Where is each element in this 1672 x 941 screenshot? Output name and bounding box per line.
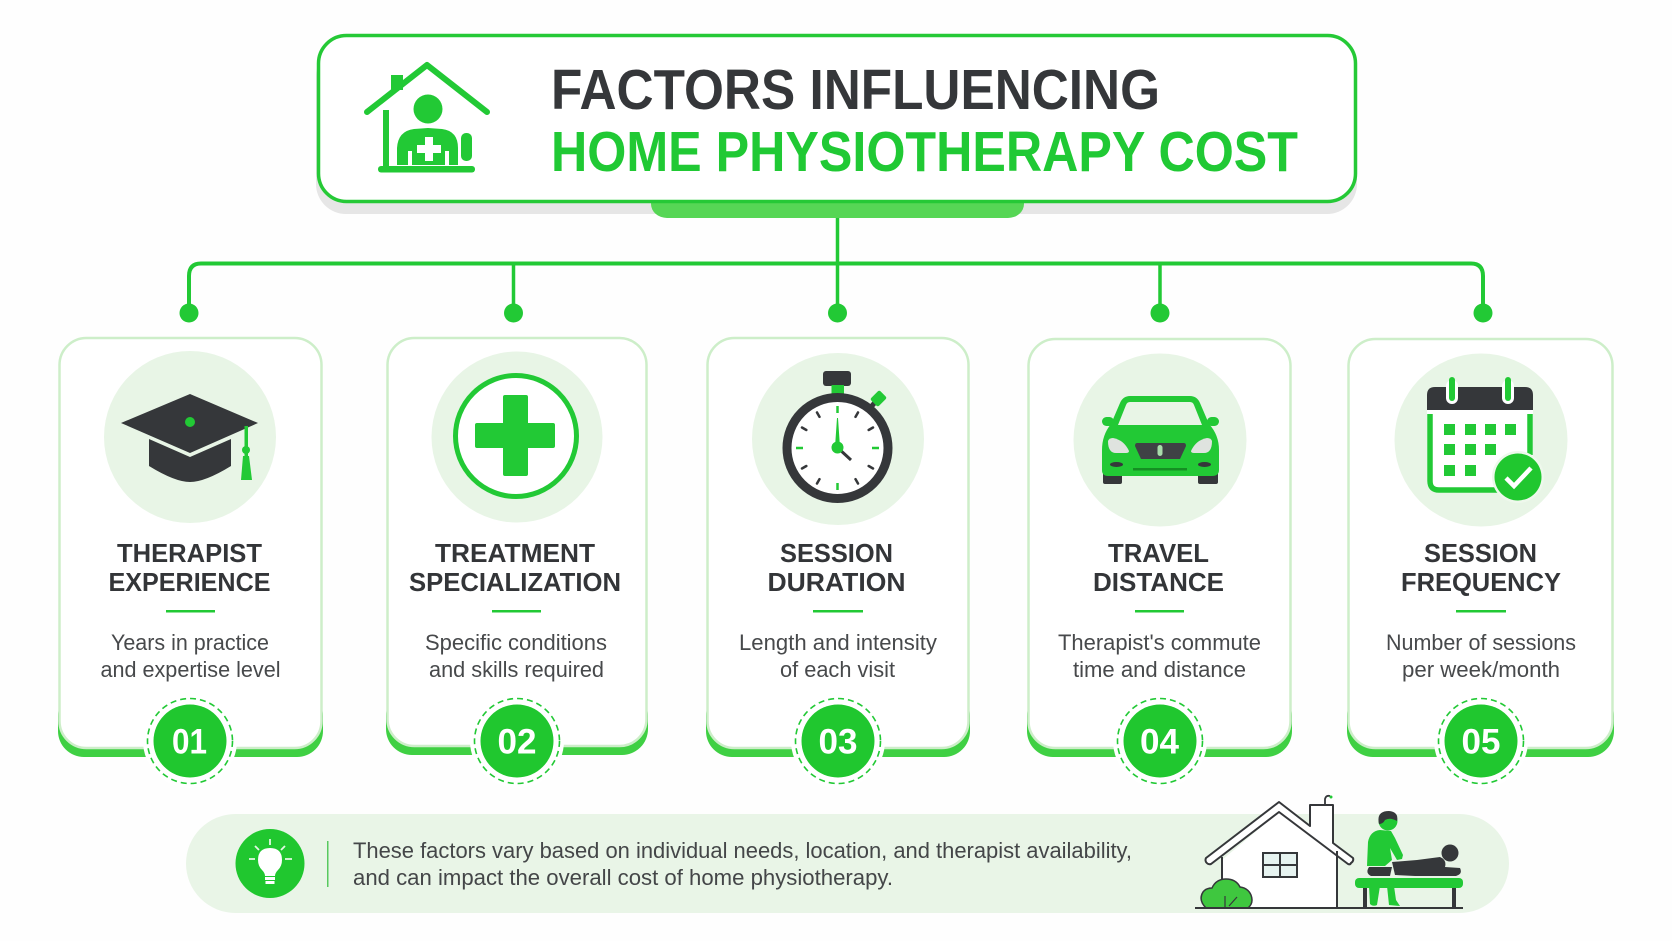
number badge 01: 01 (172, 722, 207, 762)
description: Therapist's commute (1058, 630, 1261, 655)
heading (768, 538, 906, 597)
description: and expertise level (100, 657, 280, 682)
icon: medical cross (456, 376, 576, 496)
panel: session duration (706, 338, 970, 788)
panel: therapist experience (58, 338, 323, 788)
number badge 05 (1434, 694, 1528, 788)
panel: treatment specialization (386, 338, 648, 788)
description (425, 630, 607, 682)
heading: TREATMENT (435, 538, 595, 568)
number badge 04 (1113, 694, 1207, 788)
number badge 03: 03 (818, 722, 858, 762)
description (1386, 630, 1576, 682)
icon: calendar with check (1427, 377, 1544, 503)
heading: TRAVEL (1108, 538, 1209, 568)
number badge 01 (143, 694, 237, 788)
heading: SESSION (1424, 538, 1537, 568)
icon: light bulb (236, 829, 304, 898)
heading: THERAPIST (117, 538, 262, 568)
heading: DURATION (768, 567, 906, 597)
footer text: These factors vary based on individual needs, location, and therapist availability, (353, 838, 1132, 863)
number badge 02: 02 (498, 722, 536, 762)
footer note panel (186, 796, 1509, 913)
heading (409, 538, 621, 597)
heading: SPECIALIZATION (409, 567, 621, 597)
title text (551, 58, 1298, 184)
title text: FACTORS INFLUENCING (551, 58, 1160, 122)
title text: HOME PHYSIOTHERAPY COST (551, 120, 1298, 184)
description (739, 630, 937, 682)
footer text (353, 838, 1132, 890)
icon: graduation cap (121, 394, 258, 482)
heading: SESSION (780, 538, 893, 568)
description: Specific conditions (425, 630, 607, 655)
heading: FREQUENCY (1401, 567, 1561, 597)
heading: EXPERIENCE (108, 567, 270, 597)
heading (108, 538, 270, 597)
description: and skills required (429, 657, 604, 682)
icon: stopwatch (787, 371, 888, 498)
description (1058, 630, 1261, 682)
footer text: and can impact the overall cost of home physiotherapy. (353, 865, 893, 890)
panel: session frequency (1347, 339, 1614, 788)
number badge 05: 05 (1462, 722, 1500, 762)
heading (1093, 538, 1224, 597)
heading (1401, 538, 1561, 597)
title panel (316, 36, 1357, 218)
description: Length and intensity (739, 630, 937, 655)
description (100, 630, 280, 682)
description: per week/month (1402, 657, 1560, 682)
connector tree (180, 218, 1492, 322)
heading: DISTANCE (1093, 567, 1224, 597)
description: Number of sessions (1386, 630, 1576, 655)
icon: car (1102, 396, 1219, 484)
description: of each visit (780, 657, 895, 682)
icon: house with therapist (367, 65, 487, 172)
panel: travel distance (1027, 339, 1292, 788)
illustration: house and physiotherapy session (1195, 796, 1463, 908)
description: time and distance (1073, 657, 1246, 682)
number badge 03 (791, 694, 885, 788)
number badge 02 (470, 694, 564, 788)
number badge 04: 04 (1140, 722, 1180, 762)
description: Years in practice (111, 630, 269, 655)
